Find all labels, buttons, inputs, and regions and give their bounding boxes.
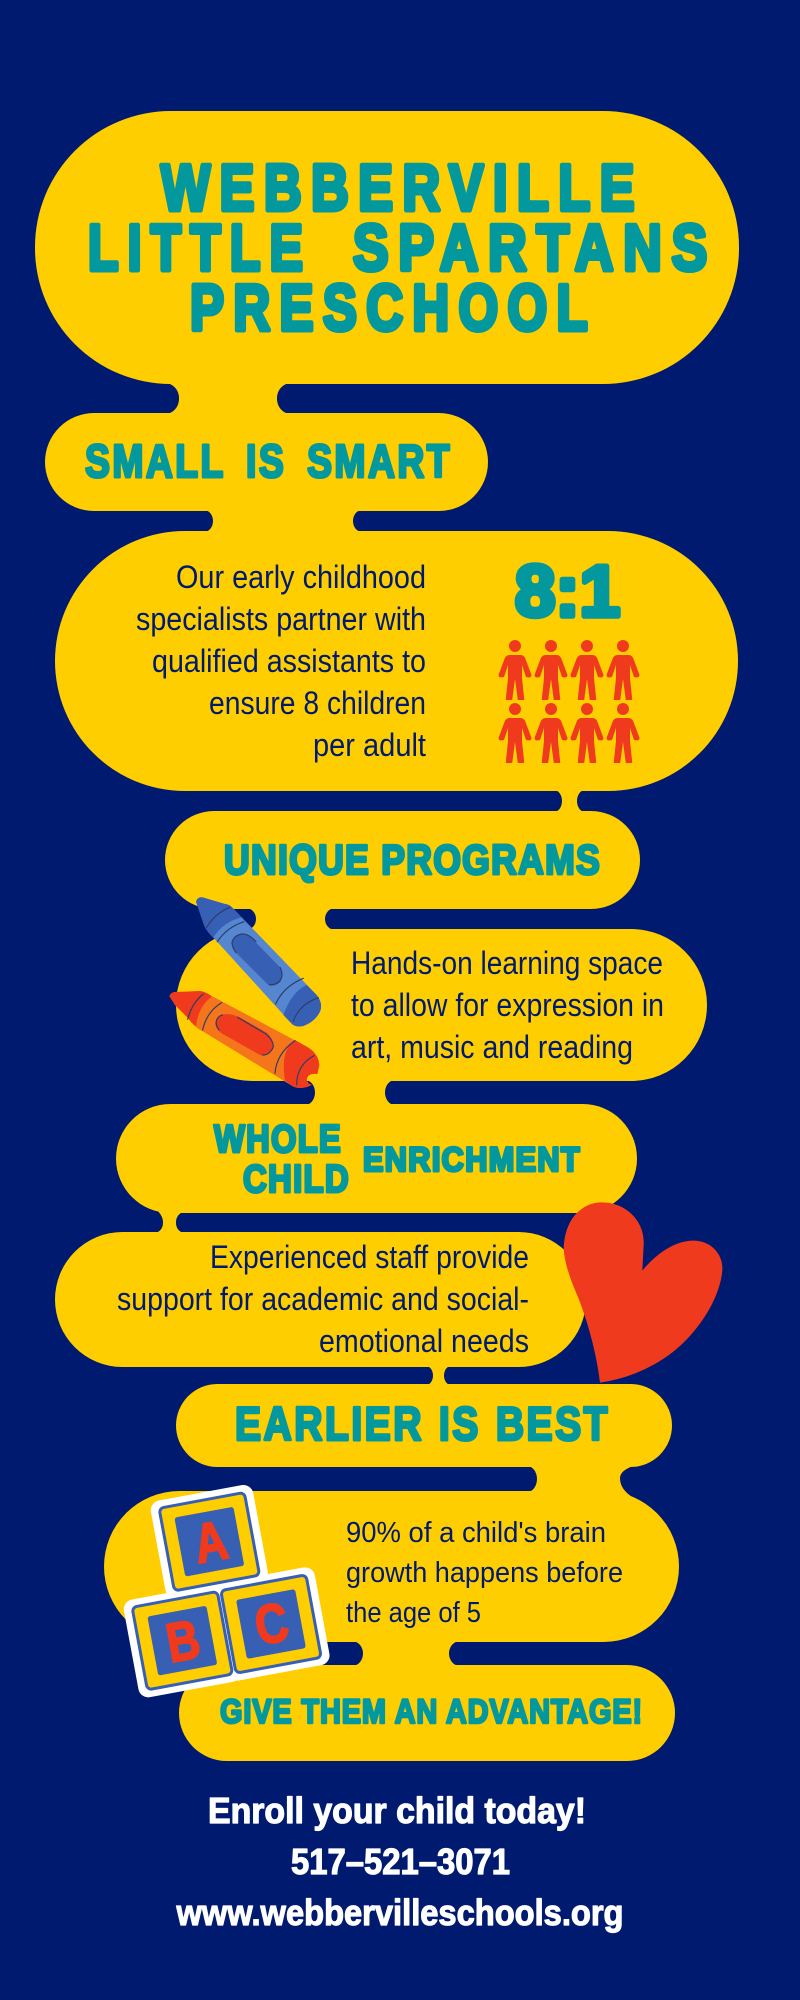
text block: hands-on learning: to allow for expression in — [351, 987, 664, 1023]
icon: red crayon — [169, 991, 319, 1088]
footer: enrollment call to action — [176, 1790, 624, 1933]
panel: hands-on learning pill — [176, 929, 707, 1081]
heading: give them an advantage: GIVE THEM AN ADVANTAGE! — [220, 1693, 643, 1731]
title — [88, 151, 717, 344]
heading: whole child enrichment: ENRICHMENT — [363, 1141, 581, 1179]
connector: whole child to staff panel — [153, 1207, 185, 1233]
text block: hands-on learning: Hands-on learning space — [351, 945, 663, 981]
ratio number: 8:1 — [515, 552, 620, 632]
text block: brain growth: growth happens before — [346, 1557, 623, 1589]
connector: earlier is best to brain growth — [527, 1465, 636, 1498]
connector: ratio to unique programs — [554, 790, 585, 812]
connector: title to small is smart — [165, 383, 291, 414]
connector: unique programs to hands-on panel — [246, 908, 335, 930]
icon: alphabet blocks — [126, 1487, 327, 1695]
text block: brain growth — [346, 1517, 623, 1629]
text block: brain growth: 90% of a child's brain — [346, 1517, 606, 1549]
heading: small is smart: SMALL IS SMART — [85, 435, 452, 487]
icon: eight children — [498, 640, 640, 763]
icon: alphabet blocks: C — [250, 1590, 293, 1657]
text block: specialists: specialists partner with — [136, 601, 426, 637]
connector: staff to earlier is best — [426, 1366, 451, 1385]
text block: brain growth: the age of 5 — [346, 1597, 481, 1629]
text block: specialists: per adult — [313, 727, 426, 763]
heading: unique programs: UNIQUE PROGRAMS — [224, 836, 601, 883]
text block: experienced staff: Experienced staff provide — [210, 1239, 529, 1275]
panel: give them an advantage pill — [179, 1665, 675, 1761]
panel: experienced staff pill — [55, 1232, 586, 1367]
connector: brain growth to advantage — [352, 1641, 460, 1666]
footer: enrollment call to action: www.webbervilleschools.org — [176, 1892, 624, 1933]
title: PRESCHOOL — [190, 271, 597, 344]
text block: experienced staff: emotional needs — [319, 1323, 529, 1359]
panel: small is smart pill — [45, 413, 488, 511]
panel: title pill — [35, 111, 739, 384]
connector: small is smart to ratio panel — [204, 510, 362, 532]
heading: whole child enrichment — [214, 1118, 581, 1201]
connector: hands-on to whole child — [305, 1080, 395, 1105]
text block: experienced staff — [117, 1239, 529, 1359]
heading: whole child enrichment: WHOLE — [214, 1118, 342, 1161]
text block: specialists: qualified assistants to — [152, 643, 426, 679]
panel: whole child enrichment pill — [116, 1104, 637, 1213]
text block: hands-on learning: art, music and reading — [351, 1029, 633, 1065]
panel: earlier is best pill — [176, 1384, 672, 1467]
heading: earlier is best: EARLIER IS BEST — [235, 1397, 610, 1450]
icon: alphabet blocks: B — [161, 1607, 205, 1674]
panel: ratio pill — [55, 531, 738, 791]
icon: heart — [564, 1202, 722, 1383]
title: LITTLE — [88, 211, 312, 284]
heading: whole child enrichment: CHILD — [243, 1158, 350, 1201]
footer: enrollment call to action: Enroll your child today! — [208, 1790, 586, 1831]
title: WEBBERVILLE — [161, 151, 644, 224]
text block: specialists — [136, 559, 426, 763]
icon: blue crayon — [196, 897, 321, 1027]
footer: enrollment call to action: 517–521–3071 — [291, 1841, 510, 1882]
panel: unique programs pill — [165, 811, 640, 909]
panel: brain growth pill — [104, 1491, 679, 1642]
title: SPARTANS — [353, 211, 717, 284]
text block: experienced staff: support for academic and social- — [117, 1281, 529, 1317]
icon: alphabet blocks: A — [189, 1508, 232, 1575]
text block: specialists: Our early childhood — [176, 559, 426, 595]
text block: hands-on learning — [351, 945, 664, 1065]
text block: specialists: ensure 8 children — [209, 685, 426, 721]
